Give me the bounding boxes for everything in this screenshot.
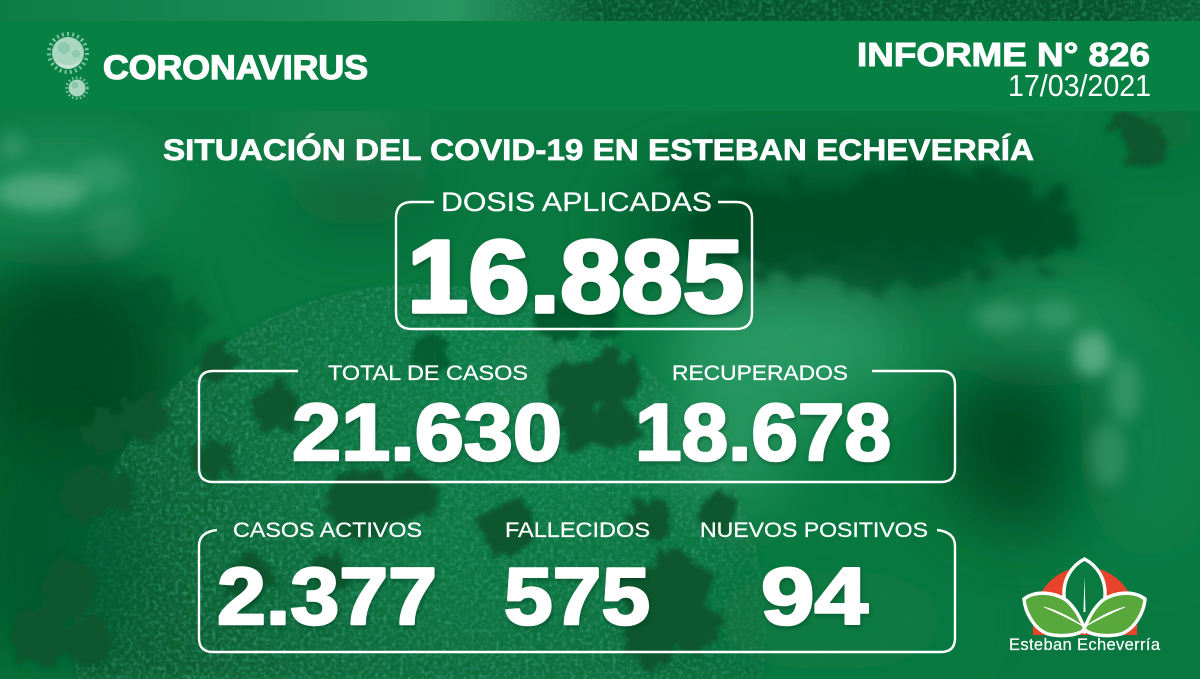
value: nuevos positivos: 94 [761,552,868,642]
top leaf [1064,559,1105,632]
right leaf [1084,593,1145,636]
heading: coronavirus: CORONAVIRUS [103,49,368,87]
red arch [1033,567,1137,635]
left leaf [1024,593,1085,636]
label: nuevos positivos: NUEVOS POSITIVOS [700,518,928,542]
dark spike clusters [12,111,1165,666]
value: 16.885 [407,219,744,334]
label: total de casos: TOTAL DE CASOS [328,361,528,385]
panel: dosis aplicadas [396,187,752,334]
report date: 17/03/2021 [1008,68,1151,103]
value: fallecidos: 575 [504,552,650,642]
label: casos activos: CASOS ACTIVOS [233,518,422,542]
report number: INFORME N° 826 [857,36,1150,73]
value: casos activos: 2.377 [217,552,437,642]
panel outline [396,202,752,329]
icon: small virus [66,78,88,98]
top strip: photo above header [0,0,1200,21]
virus body [74,284,766,679]
value: recuperados: 18.678 [635,388,891,478]
header band [0,21,1200,111]
label: recuperados: RECUPERADOS [672,361,848,385]
fading of the body to the right and bottom [40,350,950,670]
panel: total de casos y recuperados [199,361,955,482]
panel outline [199,530,955,652]
dark upper-right cluster [660,150,1080,287]
label: DOSIS APLICADAS [441,187,712,217]
value: total de casos: 21.630 [292,388,562,478]
title: SITUACIÓN DEL COVID-19 EN ESTEBAN ECHEVERRÍA [163,133,1034,167]
pale mist highlights [0,131,1141,487]
label: fallecidos: FALLECIDOS [505,518,650,542]
logo: Esteban Echeverría [1009,559,1161,654]
logo text: Esteban Echeverría [1009,636,1161,654]
panel: casos activos, fallecidos y nuevos positivos [199,518,955,652]
panel outline [199,371,955,482]
icon: large virus [49,34,87,72]
